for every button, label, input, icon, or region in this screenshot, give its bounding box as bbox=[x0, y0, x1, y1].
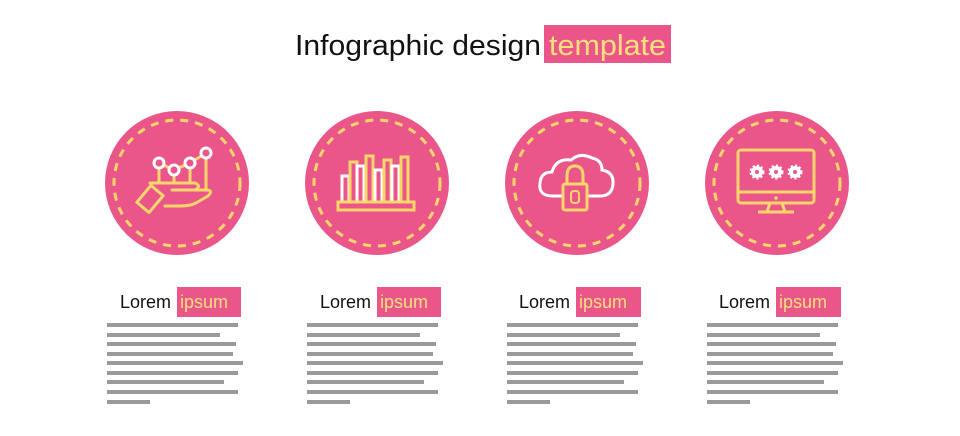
icon circle 2 bbox=[305, 111, 449, 255]
heading 3: ipsum bbox=[579, 292, 627, 312]
icon circle 4 bbox=[705, 111, 849, 255]
heading 3: Lorem bbox=[519, 292, 570, 312]
title: Infographic design bbox=[295, 30, 541, 62]
heading 2 bbox=[320, 287, 441, 317]
heading 4 bbox=[719, 287, 841, 317]
heading 1: ipsum bbox=[180, 292, 228, 312]
heading 4: ipsum bbox=[779, 292, 827, 312]
icon circle 3 bbox=[505, 111, 649, 255]
panel: cloud lock bbox=[505, 111, 649, 404]
heading 4: Lorem bbox=[719, 292, 770, 312]
text block 4 bbox=[707, 323, 843, 404]
text block 3 bbox=[507, 323, 643, 404]
text block 1 bbox=[107, 323, 243, 404]
panel: bar chart bbox=[305, 111, 449, 404]
panel: monitor bbox=[705, 111, 849, 404]
title: template bbox=[549, 30, 666, 62]
heading 1: Lorem bbox=[120, 292, 171, 312]
panel: chart in hand bbox=[105, 111, 249, 404]
heading 2: ipsum bbox=[380, 292, 428, 312]
heading 2: Lorem bbox=[320, 292, 371, 312]
heading 1 bbox=[120, 287, 241, 317]
text block 2 bbox=[307, 323, 443, 404]
heading 3 bbox=[519, 287, 641, 317]
icon circle 1 bbox=[105, 111, 249, 255]
title bbox=[295, 25, 671, 63]
